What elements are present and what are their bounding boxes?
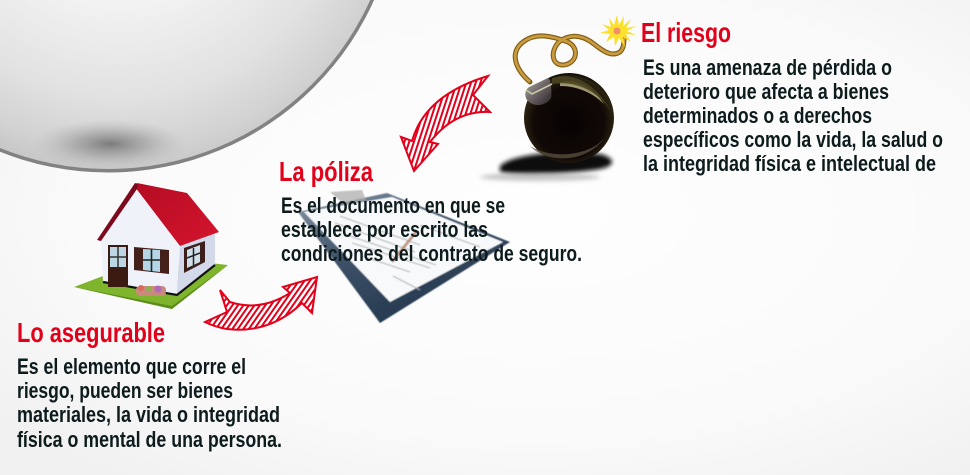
icon: clipboard document (298, 190, 510, 323)
text block: Lo asegurable: riesgo, pueden ser bienes (17, 378, 233, 403)
text block: Lo asegurable: Es el elemento que corre el (17, 354, 246, 379)
text block: El riesgo: deterioro que afecta a bienes (643, 79, 889, 104)
front window (134, 247, 169, 274)
text block: Lo asegurable: física o mental de una persona. (17, 427, 282, 452)
text block: La póliza: Es el documento en que se (281, 193, 505, 218)
icon: bomb (480, 15, 636, 181)
text block: El riesgo (643, 55, 943, 176)
text block: La póliza: establece por escrito las (281, 217, 488, 242)
icon: house (74, 183, 228, 309)
heading: Lo asegurable: Lo asegurable (17, 317, 165, 348)
text block: Lo asegurable (17, 354, 282, 452)
icon: spark (600, 15, 636, 47)
text block: Lo asegurable: materiales, la vida o integridad (17, 402, 280, 427)
text block: La póliza (281, 193, 582, 266)
text block: La póliza: condiciones del contrato de seguro. (281, 241, 582, 266)
lawn (74, 262, 228, 309)
side window (184, 241, 205, 273)
heading: La póliza: La póliza (279, 156, 373, 187)
roof (135, 183, 219, 246)
text block: El riesgo: Es una amenaza de pérdida o (643, 55, 892, 80)
walls (101, 188, 180, 294)
arrow: house to policy (205, 277, 317, 330)
flowers (136, 285, 166, 296)
arrow: bomb to policy (401, 76, 490, 171)
heading: El riesgo: El riesgo (641, 17, 731, 48)
door (108, 245, 128, 287)
decorative grey disc (0, 0, 400, 172)
text block: El riesgo: determinados o a derechos (643, 103, 872, 128)
